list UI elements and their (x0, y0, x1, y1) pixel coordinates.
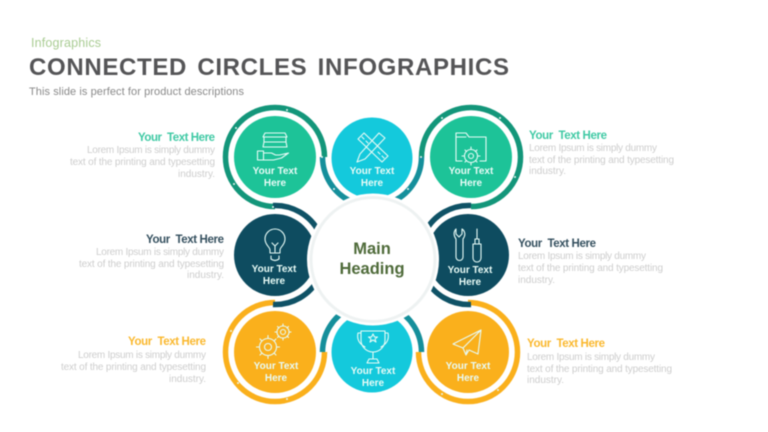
text block: top left: industry. (178, 169, 215, 180)
icon: folder with gear (456, 133, 486, 165)
text block: middle right: text of the printing and typesetting (518, 263, 663, 274)
panel: middle-left circle (234, 214, 316, 296)
text block: bottom left (61, 336, 206, 385)
text block: middle left (79, 234, 224, 281)
text block: top left: text of the printing and typesetting (70, 157, 215, 168)
text block: top left: Lorem Ipsum is simply dummy (87, 145, 215, 156)
label: Your Text (448, 265, 492, 276)
icon: hand holding stack (258, 133, 288, 160)
text block: top right: industry. (529, 166, 566, 177)
text block: top right: Your Text Here (529, 130, 607, 142)
label: Your Text (449, 166, 493, 177)
title: CONNECTED CIRCLES INFOGRAPHICS (29, 54, 509, 81)
text block: middle right: industry. (518, 275, 555, 286)
panel: main heading circle (307, 194, 439, 326)
text block: middle left: Lorem Ipsum is simply dummy (96, 247, 224, 258)
text block: top right (529, 130, 674, 177)
label: Here (265, 373, 288, 384)
text block: middle right (518, 238, 663, 286)
icon: pencil and ruler (357, 133, 388, 162)
text block: bottom right: industry. (527, 375, 564, 386)
panel: bottom-center circle (332, 312, 412, 392)
main heading: Main (353, 240, 391, 258)
icon: paper plane (453, 330, 481, 355)
icon: trophy (358, 331, 388, 363)
text block: bottom right (527, 338, 672, 386)
panel: bottom-right circle (427, 311, 509, 393)
text block: bottom right: Lorem Ipsum is simply dummy (527, 352, 655, 363)
panel: middle-right circle (427, 214, 509, 296)
panel: top-right circle (430, 116, 512, 198)
icon: light bulb (265, 229, 285, 260)
text block: top left (70, 132, 215, 180)
text block: top right: text of the printing and typesetting (529, 155, 674, 166)
text block: bottom left: Lorem Ipsum is simply dummy (78, 350, 206, 361)
label: Here (361, 178, 384, 189)
label: Here (457, 373, 480, 384)
text block: bottom left: Your Text Here (128, 336, 206, 348)
text block: middle right: Lorem Ipsum is simply dummy (518, 251, 646, 262)
label: Your Text (253, 166, 297, 177)
label: Your Text (350, 166, 394, 177)
label: Here (263, 276, 286, 287)
panel: top-left circle (234, 116, 316, 198)
label: Your Text (351, 366, 395, 377)
subtitle: This slide is perfect for product descriptions (29, 86, 244, 98)
text block: middle left: industry. (187, 270, 224, 281)
icon: wrench and screwdriver (454, 229, 481, 262)
label: Here (264, 178, 287, 189)
text block: bottom left: text of the printing and typesetting (61, 362, 206, 373)
text block: bottom left: industry. (169, 374, 206, 385)
label: Your Text (446, 361, 490, 372)
label: Your Text (254, 361, 298, 372)
text block: bottom right: text of the printing and typesetting (527, 364, 672, 375)
panel: bottom-left circle (234, 311, 316, 393)
label: Here (362, 378, 385, 389)
text block: top left: Your Text Here (138, 132, 215, 144)
text block: middle right: Your Text Here (518, 238, 596, 250)
icon: gears (256, 324, 291, 358)
label: Here (459, 277, 482, 288)
category label: Infographics (31, 36, 101, 50)
main heading: Heading (339, 260, 405, 278)
label: Here (460, 178, 483, 189)
text block: bottom right: Your Text Here (527, 338, 605, 350)
ring arcs (225, 108, 520, 401)
text block: top right: Lorem Ipsum is simply dummy (529, 143, 657, 154)
panel: top-center circle (332, 118, 412, 198)
text block: middle left: Your Text Here (146, 234, 224, 246)
label: Your Text (252, 264, 296, 275)
text block: middle left: text of the printing and typesetting (79, 259, 224, 270)
